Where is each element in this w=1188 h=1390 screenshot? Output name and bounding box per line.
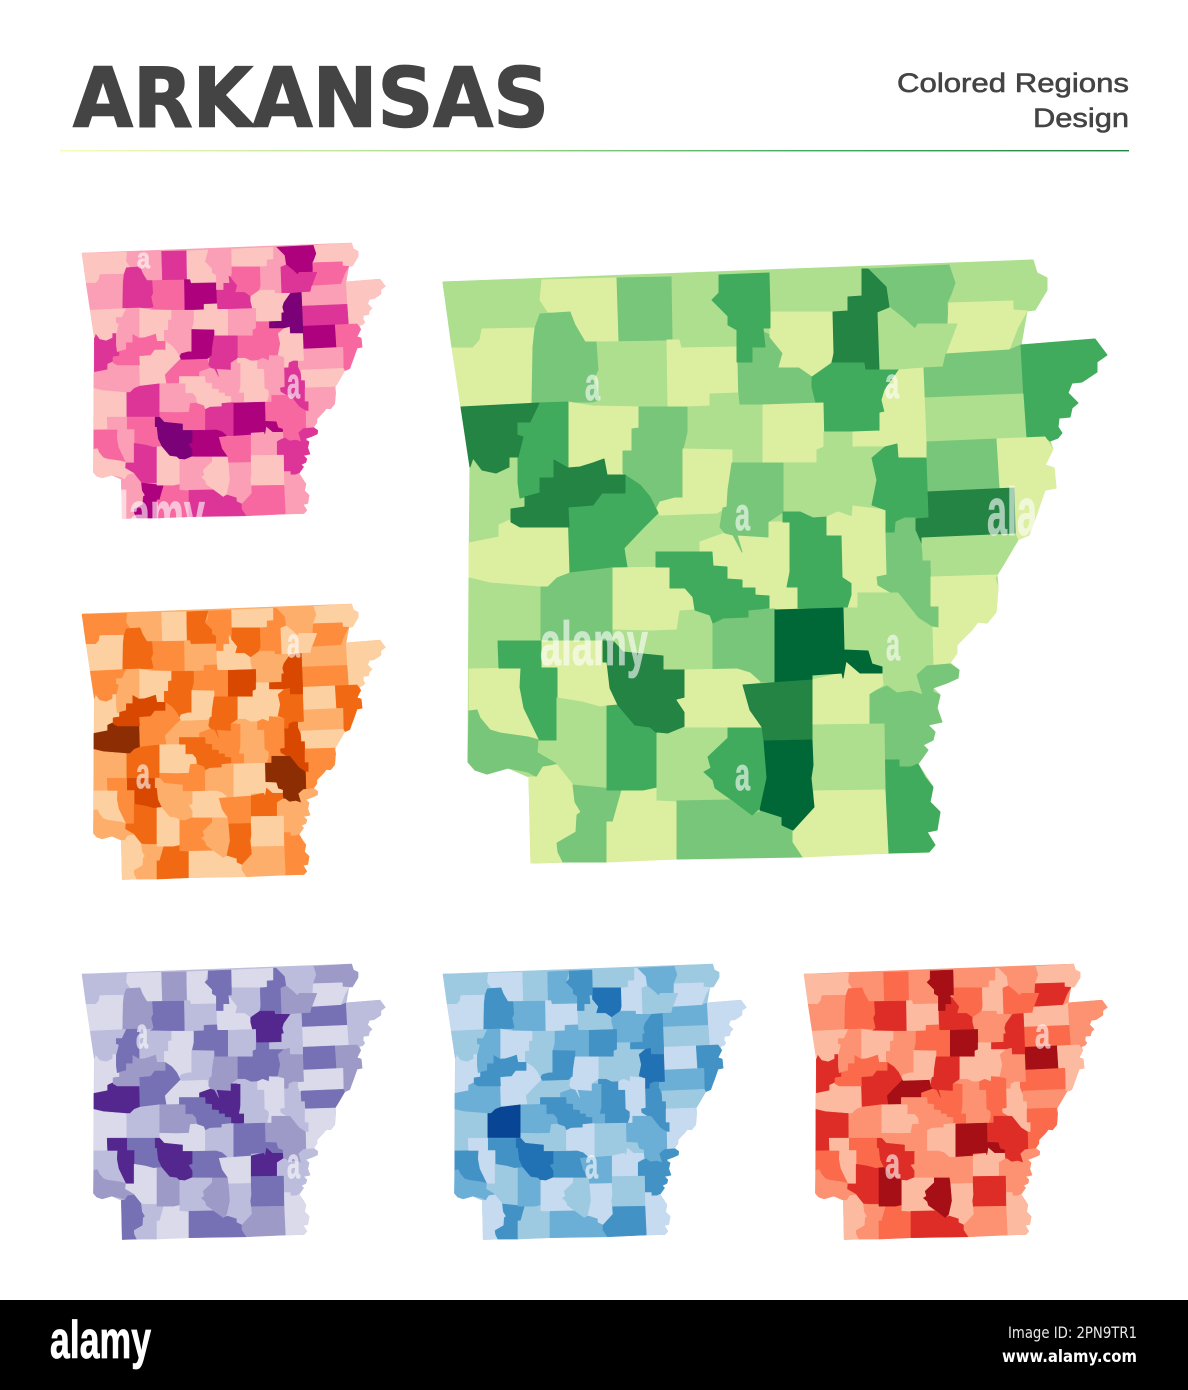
subtitle: Colored Regions xyxy=(897,68,1129,98)
watermark: a xyxy=(137,243,151,275)
watermark: a xyxy=(1035,1009,1050,1058)
watermark: a xyxy=(585,1140,598,1187)
watermark: alamy xyxy=(540,610,648,679)
header rule xyxy=(60,150,1129,151)
watermark: a xyxy=(886,618,900,670)
watermark: a xyxy=(287,619,300,666)
watermark: ala xyxy=(987,474,1038,550)
watermark: a xyxy=(287,359,300,408)
watermark: a xyxy=(287,1139,300,1188)
map: green large xyxy=(443,260,1107,863)
map: red small xyxy=(804,964,1107,1240)
map: pink small xyxy=(82,243,385,519)
website: www.alamy.com xyxy=(1002,1347,1137,1367)
map: orange small xyxy=(82,604,385,880)
map: purple small xyxy=(82,964,385,1240)
watermark: a xyxy=(885,1139,900,1188)
watermark: a xyxy=(735,488,750,540)
watermark xyxy=(97,243,1050,1188)
image id: Image ID: 2PN9TR1 xyxy=(1008,1323,1137,1342)
watermark: alamy xyxy=(97,480,205,549)
map: blue small xyxy=(443,964,746,1240)
watermark: a xyxy=(735,748,750,800)
watermark: a xyxy=(136,1009,148,1058)
footer logo: alamy xyxy=(50,1311,151,1370)
watermark: a xyxy=(585,358,600,410)
watermark: a xyxy=(136,749,150,798)
footer bar xyxy=(0,1300,1188,1390)
title: ARKANSAS xyxy=(73,52,549,146)
watermark: a xyxy=(885,359,899,408)
subtitle xyxy=(897,68,1129,133)
subtitle: Design xyxy=(1033,103,1129,133)
